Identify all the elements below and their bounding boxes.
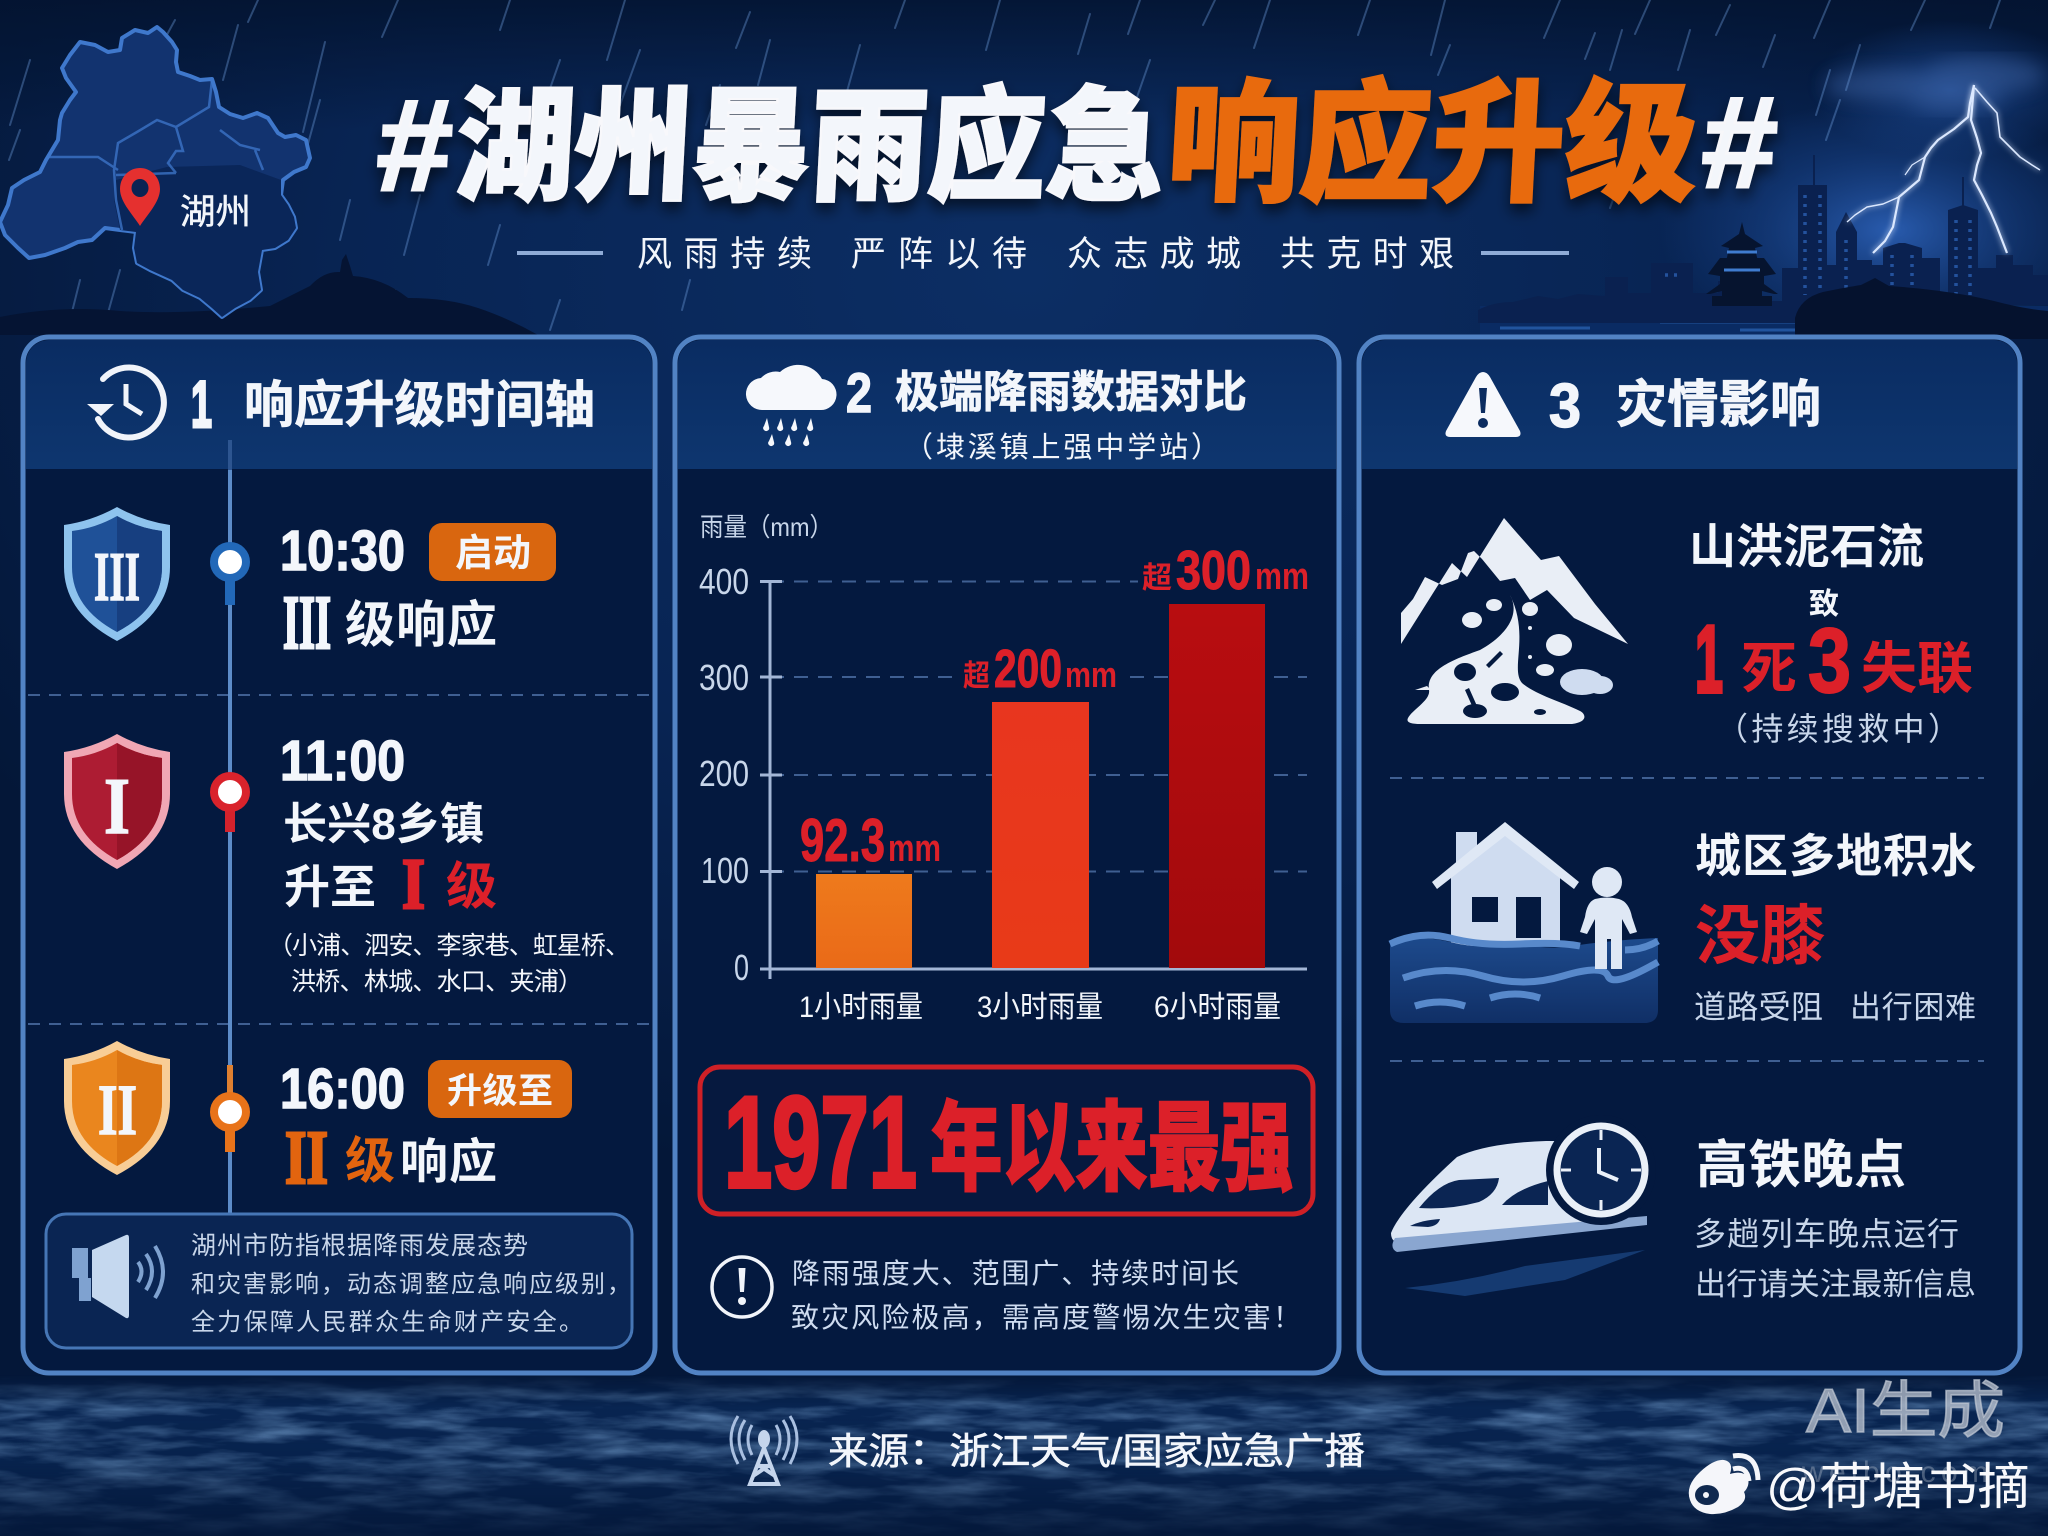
event: 16:00: II — [285, 1116, 328, 1200]
shield II: II — [98, 1070, 137, 1150]
event: 11:00 — [268, 729, 630, 996]
bar chart: 300 — [699, 657, 749, 698]
watermark: weibo.com: weibo.com — [1801, 1456, 1988, 1489]
badge: start — [429, 523, 556, 581]
note box: 全力保障人民群众生命财产安全。 — [191, 1309, 583, 1336]
panel heading: 灾情影响 — [1616, 376, 1821, 433]
subtitle: 严阵以待 — [851, 235, 1027, 274]
panel heading: 1 — [191, 367, 212, 441]
bar chart: 200 — [699, 753, 749, 794]
subtitle — [517, 235, 1569, 274]
bar chart: 0 — [734, 947, 749, 988]
bar: 6 hours: 超 — [1142, 562, 1172, 595]
map of Huzhou — [0, 27, 310, 317]
warning note: 降雨强度大、范围广、持续时间长 — [792, 1258, 1239, 1289]
bar: 1 hour: mm — [888, 828, 941, 870]
timeline node: 16:00 — [214, 1096, 246, 1128]
item: high-speed rail delays: 高铁晚点 — [1696, 1137, 1906, 1195]
item: landslide: （持续搜救中） — [1716, 711, 1960, 747]
panel heading — [1446, 372, 1821, 441]
bar chart: 雨量（mm） — [700, 512, 833, 542]
item: landslide: 山洪泥石流 — [1689, 520, 1924, 573]
event: 11:00: 升至 — [284, 861, 376, 913]
event: 11:00: 11:00 — [280, 729, 405, 793]
shield III: III — [94, 539, 140, 616]
bar: 6 hours: mm — [1255, 556, 1309, 598]
item: landslide: 3 — [1808, 610, 1851, 712]
item: high-speed rail delays: 多趟列车晚点运行 — [1694, 1216, 1959, 1252]
title: # — [374, 72, 456, 218]
icon: warning triangle — [1446, 372, 1520, 437]
bar: 1 hour: 1小时雨量 — [799, 991, 923, 1024]
bar: 3 hours: 超 — [963, 660, 990, 693]
pagoda — [1704, 222, 1778, 306]
panel heading: 极端降雨数据对比 — [895, 368, 1247, 417]
bar: 6 hours — [1142, 539, 1309, 1024]
icon: train and clock — [1391, 1115, 1656, 1296]
event: 11:00: 长兴8乡镇 — [283, 800, 484, 849]
title: 湖州暴雨应急 — [453, 79, 1168, 217]
bar: 6 hours: 6小时雨量 — [1154, 991, 1281, 1024]
event: 16:00: 16:00 — [280, 1057, 405, 1121]
note box: 和灾害影响，动态调整应急响应级别， — [191, 1271, 631, 1298]
item: landslide — [1401, 518, 1973, 747]
item: landslide: 失联 — [1861, 637, 1973, 700]
bar: 3 hours — [963, 639, 1117, 1024]
location pin — [120, 168, 160, 226]
callout: strongest since 1971: 年以来最强 — [930, 1093, 1293, 1203]
item: urban flooding: 城区多地积水 — [1695, 830, 1976, 882]
event: 10:30: 级响应 — [345, 597, 497, 653]
item: landslide: 致 — [1809, 588, 1839, 621]
source footer: 来源：浙江天气/国家应急广播 — [828, 1431, 1365, 1472]
panel heading: 3 — [1549, 372, 1581, 441]
item: urban flooding: 没膝 — [1695, 899, 1825, 972]
icon: rain cloud — [746, 365, 837, 446]
event: 11:00: 洪桥、林城、水口、夹浦） — [291, 968, 583, 996]
event: 10:30 — [280, 519, 556, 665]
watermark: account name: @荷塘书摘 — [1766, 1459, 2030, 1515]
icon: clock history — [87, 368, 164, 438]
callout: strongest since 1971: 1971 — [724, 1069, 917, 1215]
timeline node: 10:30 — [214, 546, 246, 578]
shield I: I — [104, 763, 130, 851]
note box — [46, 1214, 632, 1348]
item: high-speed rail delays: 出行请关注最新信息 — [1695, 1267, 1976, 1302]
icon: weibo logo — [1689, 1456, 1758, 1514]
panel: rainfall comparison — [675, 337, 1339, 1373]
panel: disaster impact — [1359, 337, 2020, 1373]
event: 10:30: 10:30 — [280, 519, 405, 583]
panel heading: 响应升级时间轴 — [244, 377, 595, 433]
item: urban flooding — [1390, 822, 1976, 1025]
bar: 6 hours: 300 — [1176, 539, 1251, 601]
map label: 湖州 — [180, 193, 251, 232]
panel heading: 2 — [846, 361, 872, 424]
water texture — [0, 1375, 2048, 1536]
bar: 1 hour: 92.3 — [800, 807, 885, 874]
foreground island — [1795, 278, 2048, 339]
bar chart — [699, 512, 1313, 1024]
event: 11:00: I — [402, 844, 425, 924]
title: # — [1699, 69, 1781, 215]
left hill silhouette — [0, 254, 538, 335]
title — [374, 69, 1781, 218]
subtitle: 众志成城 — [1067, 235, 1241, 274]
item: landslide: 死 — [1741, 637, 1797, 700]
panel heading — [746, 361, 1247, 464]
city skyline — [1478, 155, 2048, 339]
item: landslide: 1 — [1695, 606, 1723, 713]
badge: upgrade — [428, 1060, 572, 1118]
badge: start: 启动 — [455, 533, 531, 575]
callout: strongest since 1971 — [700, 1067, 1313, 1215]
icon: exclamation circle — [712, 1257, 772, 1317]
subtitle: 风雨持续 — [637, 235, 812, 274]
warning note: 致灾风险极高，需高度警惕次生灾害！ — [791, 1302, 1301, 1333]
title: 响应升级 — [1164, 70, 1701, 218]
panel heading — [87, 367, 595, 441]
event: 11:00: （小浦、泗安、李家巷、虹星桥、 — [268, 932, 630, 960]
icon: megaphone — [72, 1235, 163, 1318]
bar: 3 hours: mm — [1065, 654, 1117, 695]
badge: upgrade: 升级至 — [447, 1072, 553, 1111]
timeline node: 11:00 — [214, 776, 246, 808]
warning note — [712, 1257, 1301, 1333]
event: 11:00: 级 — [446, 858, 497, 915]
event: 16:00: 响应 — [400, 1136, 497, 1189]
bar chart: 400 — [699, 561, 749, 602]
shield III — [64, 507, 170, 641]
lightning — [1847, 85, 2040, 253]
event: 16:00 — [280, 1057, 572, 1200]
event: 16:00: 级 — [345, 1133, 395, 1189]
shield I — [64, 734, 170, 869]
timeline axis — [225, 440, 235, 1213]
bar chart: 100 — [701, 850, 749, 891]
note box: 湖州市防指根据降雨发展态势 — [191, 1232, 528, 1260]
icon: broadcast tower — [731, 1416, 797, 1484]
event: 10:30: III — [283, 581, 331, 665]
bar: 1 hour — [799, 807, 941, 1024]
lake water upper right — [1480, 306, 2048, 338]
watermark: AI generated: AI生成 — [1806, 1377, 2005, 1446]
icon: flooded house and person — [1390, 822, 1658, 1023]
item: urban flooding: 道路受阻 — [1694, 989, 1823, 1025]
item: high-speed rail delays — [1391, 1115, 1976, 1302]
panel heading: （埭溪镇上强中学站） — [904, 431, 1220, 464]
bar: 3 hours: 3小时雨量 — [977, 991, 1103, 1024]
panel: response timeline — [23, 337, 655, 1373]
icon: mountain landslide — [1401, 518, 1628, 724]
subtitle: 共克时艰 — [1280, 235, 1454, 274]
source footer — [731, 1416, 1365, 1484]
shield II — [64, 1041, 170, 1175]
item: urban flooding: 出行困难 — [1850, 990, 1976, 1025]
bar: 3 hours: 200 — [994, 639, 1062, 699]
